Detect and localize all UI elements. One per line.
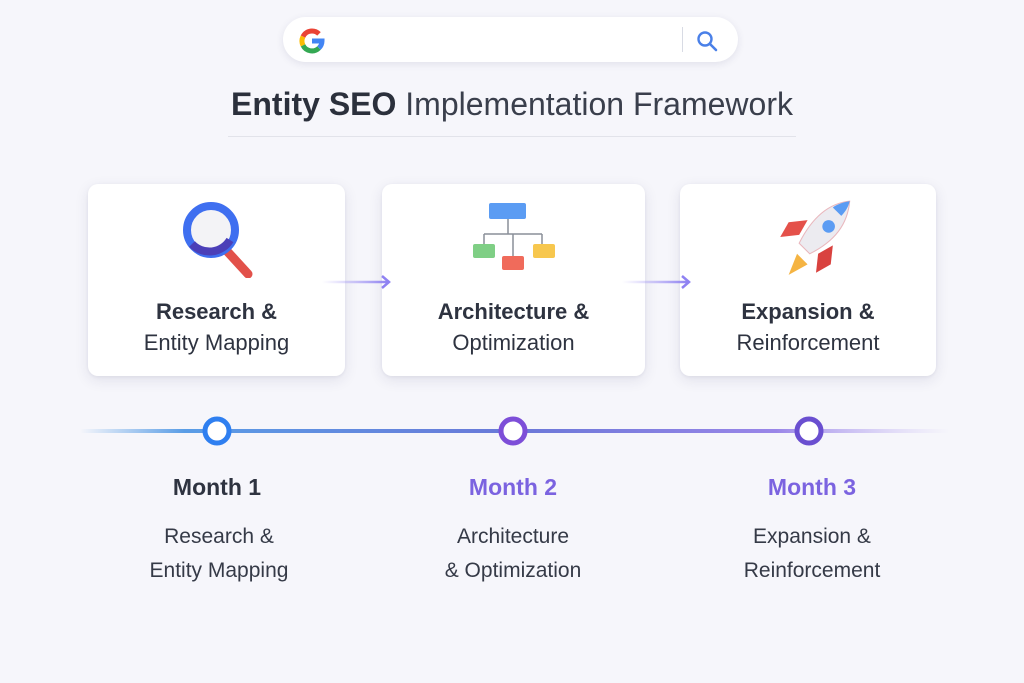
text: month 3 description: Expansion & <box>753 525 871 548</box>
title: Entity SEO Implementation Framework <box>231 86 793 122</box>
text: month 2 description: & Optimization <box>445 559 581 582</box>
text: month 1 description: Entity Mapping <box>150 559 288 582</box>
label: month 1: Month 1 <box>173 474 261 500</box>
card 3 <box>680 184 936 376</box>
timeline <box>86 416 930 446</box>
text: month 1 description: Research & <box>164 525 274 548</box>
card text: Optimization <box>452 330 575 355</box>
card text <box>736 299 880 355</box>
marker month 2 <box>501 419 525 443</box>
marker month 3 <box>797 419 821 443</box>
card text: Research & <box>156 299 277 324</box>
text: month 1 description <box>150 525 288 582</box>
card text: Architecture & <box>438 299 589 324</box>
arrow 2 <box>628 275 691 289</box>
label: month 2: Month 2 <box>469 474 557 500</box>
text: month 2 description: Architecture <box>457 525 569 548</box>
card text <box>144 299 289 355</box>
text: month 2 description <box>445 525 581 582</box>
label: month 3: Month 3 <box>768 474 856 500</box>
card 1 <box>88 184 345 376</box>
icon: google G <box>299 28 325 54</box>
icon: search magnifier <box>697 31 718 52</box>
marker month 1 <box>205 419 229 443</box>
card text: Reinforcement <box>736 330 880 355</box>
text: month 3 description <box>744 525 880 582</box>
arrow 1 <box>328 275 391 289</box>
icon: magnifier <box>183 202 252 278</box>
text: month 3 description: Reinforcement <box>744 559 880 582</box>
card text: Expansion & <box>741 299 875 324</box>
card text <box>438 299 589 355</box>
icon: hierarchy <box>473 203 555 270</box>
search bar <box>283 17 738 62</box>
card 2 <box>382 184 645 376</box>
icon: rocket <box>780 200 850 275</box>
card text: Entity Mapping <box>144 330 289 355</box>
